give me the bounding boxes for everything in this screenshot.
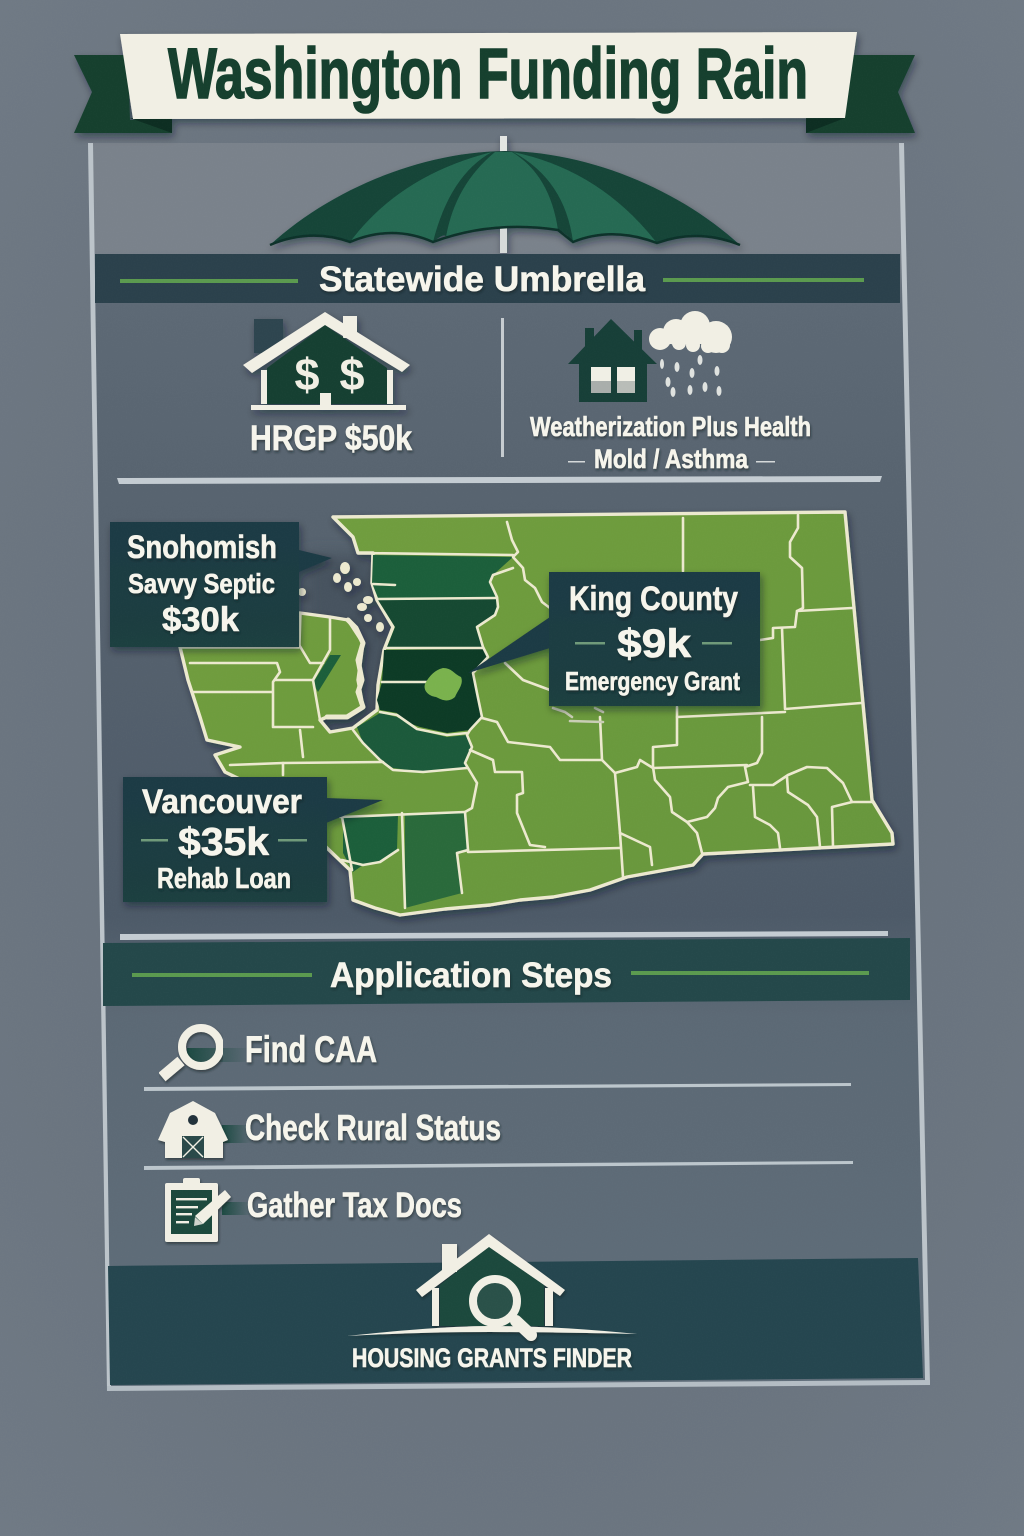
heading: Statewide Umbrella [319, 260, 646, 299]
icon: barn [158, 1101, 228, 1158]
county: Cowlitz [343, 815, 398, 872]
icon: house and magnifier [347, 1234, 637, 1336]
callout: Vancouver: Vancouver [142, 783, 302, 821]
step 2: Check Rural Status: Check Rural Status [245, 1107, 501, 1148]
section divider [117, 476, 882, 484]
text: weatherization [530, 411, 811, 474]
heading: Application Steps [330, 956, 612, 995]
divider between programs [501, 318, 504, 457]
callout: Snohomish: $30k [162, 601, 239, 639]
callout: Vancouver: $35k [178, 821, 269, 864]
icon: house with dollars [243, 312, 410, 410]
county: Pierce [357, 713, 472, 772]
callout: King County [468, 572, 760, 706]
step 3: Gather Tax Docs: Gather Tax Docs [247, 1186, 462, 1225]
title: Washington Funding Rain [168, 35, 808, 114]
band: statewide umbrella [95, 254, 900, 303]
logo: Housing Grants Finder: HOUSING GRANTS FINDER [352, 1343, 632, 1373]
step 1: Find CAA [162, 1028, 377, 1077]
text: weatherization: Mold / Asthma [594, 444, 749, 474]
step divider [144, 1161, 853, 1170]
icon: house with rain cloud [568, 311, 732, 402]
water: Puget Sound [305, 555, 395, 738]
King County marker [425, 668, 462, 700]
callout: King County: King County [569, 580, 738, 618]
title banner [74, 32, 915, 133]
county: Snohomish [378, 599, 498, 647]
step 2: Check Rural Status [158, 1101, 501, 1158]
callout: King County: Emergency Grant [565, 666, 740, 696]
icon: umbrella [270, 136, 740, 253]
step 1: Find CAA: Find CAA [245, 1029, 377, 1070]
county: Skagit [372, 555, 513, 598]
step divider [144, 1083, 851, 1091]
footer band [108, 1258, 923, 1385]
inlet [313, 655, 341, 692]
icon: house with dollars: $ [339, 349, 365, 400]
band: application steps [103, 938, 910, 1006]
map: Washington counties [180, 512, 893, 915]
right ribbon [806, 55, 915, 133]
callout: Snohomish [110, 522, 332, 647]
icon: magnifier [162, 1028, 220, 1077]
left ribbon [74, 55, 172, 133]
county: King [377, 649, 488, 733]
icon: house with dollars: $ [294, 349, 320, 400]
logo: Housing Grants Finder [347, 1234, 637, 1373]
icon: clipboard [165, 1178, 231, 1242]
callout: Snohomish: Snohomish [127, 529, 277, 565]
text: weatherization: Weatherization Plus Health [530, 411, 811, 442]
callout: Snohomish: Savvy Septic [128, 568, 275, 599]
callout: King County: $9k [617, 622, 692, 666]
section divider [120, 931, 888, 940]
callout: Vancouver: Rehab Loan [157, 863, 291, 895]
state land [180, 512, 893, 915]
step 3: Gather Tax Docs [165, 1178, 462, 1242]
callout: Vancouver [123, 777, 383, 902]
panel: main frame [88, 143, 930, 1391]
text: HRGP: HRGP $50k [250, 419, 412, 458]
banner paper [120, 32, 857, 119]
county: Skamania [405, 813, 468, 908]
county lines [190, 515, 872, 908]
islands [298, 562, 384, 632]
